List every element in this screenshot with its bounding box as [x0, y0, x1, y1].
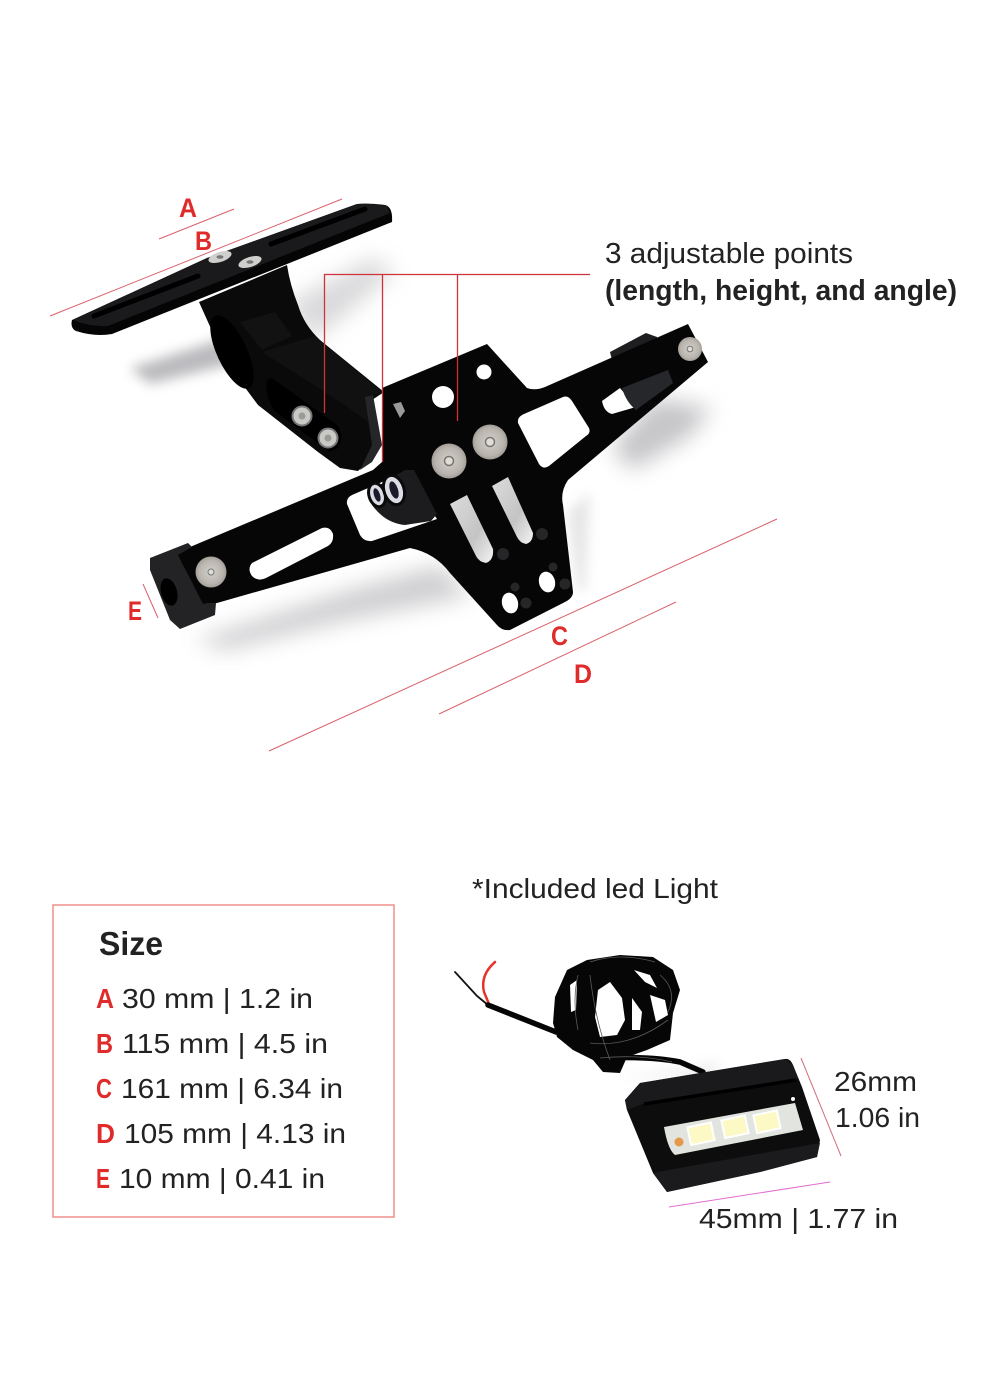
line B [50, 199, 342, 316]
label B: B [195, 226, 212, 256]
panel: size table [53, 905, 394, 1217]
callout line 1: 3 adjustable points [605, 238, 853, 270]
led height dimension line [801, 1058, 841, 1156]
hinge knob and springs [366, 470, 437, 525]
adjustable points callout [605, 238, 957, 307]
rivet notch [393, 402, 405, 418]
small rear screws [497, 528, 570, 608]
led width label: 45mm | 1.77 in [699, 1203, 898, 1234]
top mounting plate [72, 204, 392, 335]
row C: 161 mm | 6.34 in [121, 1073, 343, 1104]
bolt: right arm [678, 337, 702, 361]
line C [269, 519, 777, 751]
led height label: 1.06 in [835, 1102, 920, 1133]
row B: 115 mm | 4.5 in [122, 1028, 328, 1059]
row D: D [96, 1118, 115, 1149]
slot: vertical right [492, 477, 533, 544]
dimension lines [50, 199, 777, 751]
label C: C [551, 621, 568, 651]
bolt: centre right [472, 424, 508, 460]
heading: included led light: *Included led Light [472, 873, 718, 904]
bolt: centre left [432, 444, 466, 478]
cable coil [488, 955, 703, 1073]
row C: C [96, 1073, 112, 1104]
led chip 1 [687, 1122, 715, 1145]
slot: right arm [602, 388, 636, 414]
row A: 30 mm | 1.2 in [122, 983, 313, 1014]
row A: A [96, 983, 114, 1014]
product: led light [455, 955, 820, 1192]
led panel [664, 1103, 803, 1155]
coil mass [553, 955, 680, 1073]
rear knob right [610, 333, 660, 372]
hole: lower left [500, 591, 520, 615]
product: adjustable bracket [72, 204, 708, 630]
knob seen through right slot [622, 370, 673, 410]
panel border [53, 905, 394, 1217]
line E [143, 584, 158, 618]
label A: A [179, 193, 197, 223]
led height label: 26mm [834, 1066, 917, 1097]
led chip 3 [753, 1110, 781, 1133]
led height label [834, 1066, 920, 1133]
line D [439, 602, 676, 714]
row B: B [96, 1028, 113, 1059]
label D: D [574, 659, 592, 689]
row D: 105 mm | 4.13 in [124, 1118, 346, 1149]
adjustable points leader lines [324, 274, 590, 462]
slot: vertical left [450, 495, 493, 563]
hole: upper small [476, 364, 492, 380]
hole: upper large [432, 386, 454, 408]
led chip 2 [721, 1115, 749, 1138]
row E: 10 mm | 0.41 in [119, 1163, 325, 1194]
left end nut [150, 543, 217, 629]
cable bare wires [455, 962, 495, 1005]
bolt: left arm [196, 556, 226, 588]
led width dimension line [669, 1182, 830, 1207]
cable lead and tail [488, 1005, 703, 1072]
row E: E [96, 1163, 110, 1194]
led housing [625, 1059, 820, 1192]
coil highlights [575, 957, 672, 1062]
line A [159, 209, 234, 239]
callout line 2: (length, height, and angle) [605, 275, 957, 307]
mounting arm [199, 265, 384, 471]
bracket shadows [130, 258, 720, 1078]
hole: lower right [537, 570, 557, 594]
window: central cut-out [347, 472, 437, 541]
window: right arm [518, 396, 590, 468]
label E: E [128, 596, 142, 626]
slot: left arm [250, 528, 333, 580]
heading: size: Size [99, 925, 163, 962]
orange indicator dot [674, 1138, 684, 1146]
main license plate frame [177, 324, 708, 630]
